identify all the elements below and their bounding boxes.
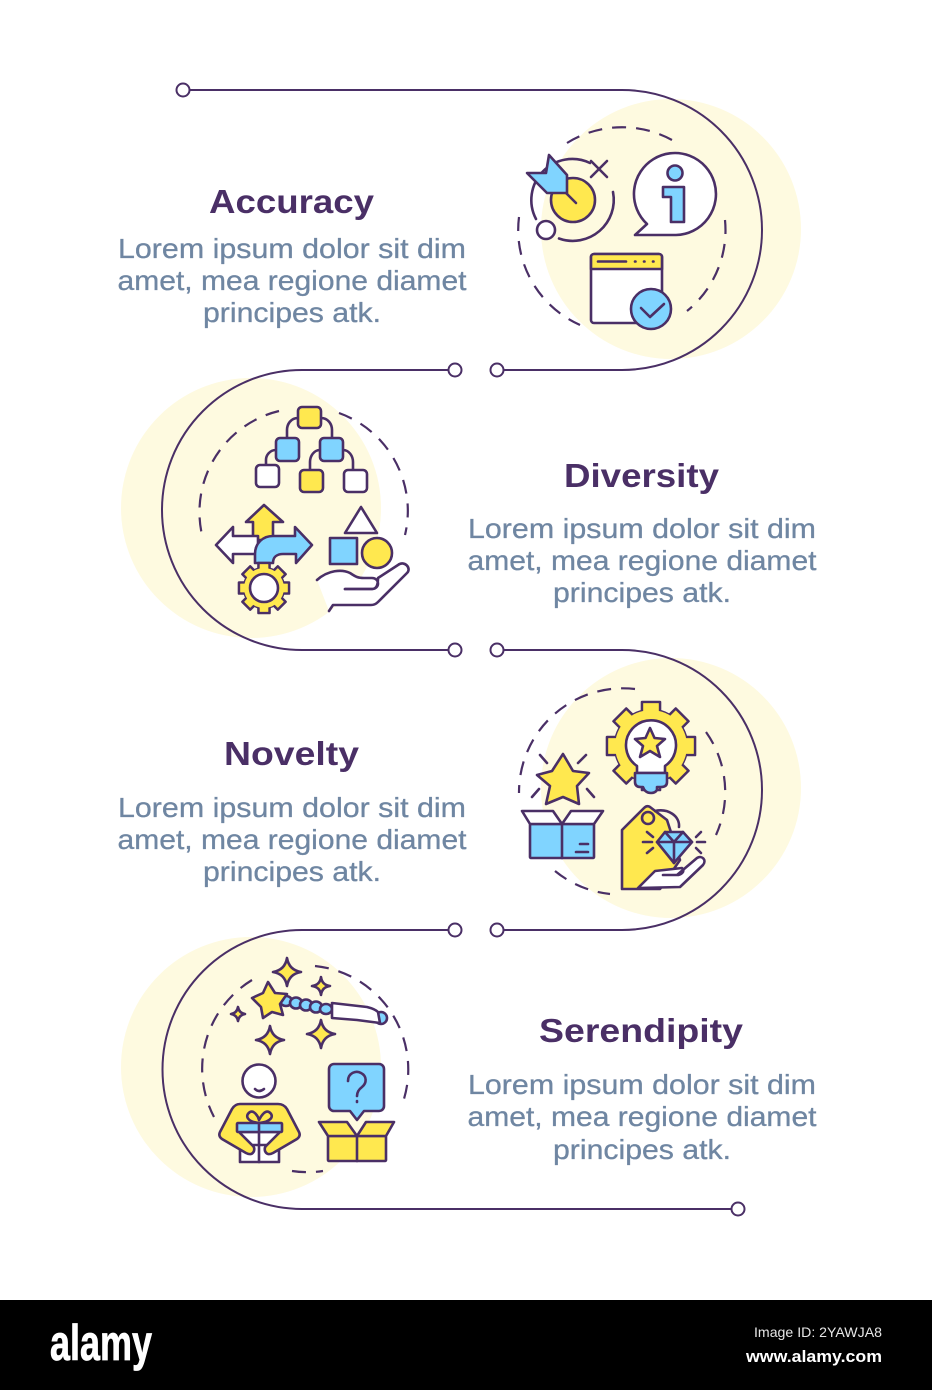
dashed ring [199, 411, 408, 539]
icon: target with arrow [527, 155, 614, 241]
panel: serendipity text [468, 1012, 817, 1165]
text block: novelty: amet, mea regione diamet [118, 824, 467, 855]
icon: lightbulb in gear [607, 702, 695, 793]
dashed ring [519, 688, 725, 894]
icon: star rising from box [522, 754, 603, 858]
website: www.alamy.com [745, 1347, 882, 1366]
text block: diversity: Lorem ipsum dolor sit dim [468, 513, 816, 544]
connector line with end dots [162, 84, 762, 1216]
text block: novelty: Lorem ipsum dolor sit dim [118, 792, 466, 823]
icon: magic wand with sparkles [231, 958, 387, 1054]
text block: novelty: principes atk. [203, 856, 381, 887]
text block: serendipity [468, 1069, 817, 1165]
icon: info speech bubble [634, 153, 716, 235]
footer bar [0, 1300, 932, 1390]
text block: serendipity: principes atk. [553, 1134, 731, 1165]
icon: decision tree [256, 407, 367, 492]
text block: serendipity: Lorem ipsum dolor sit dim [468, 1069, 816, 1100]
icon: open box with question bubble [319, 1064, 394, 1161]
image id: Image ID: 2YAWJA8 [754, 1324, 882, 1340]
panel: diversity icons [199, 407, 409, 613]
icon: person holding gift [219, 1064, 300, 1162]
heading: serendipity: Serendipity [539, 1012, 744, 1049]
text block: accuracy [118, 233, 467, 328]
panel: serendipity icons [202, 958, 408, 1172]
panel: accuracy text [118, 183, 467, 328]
panel: accuracy icons [518, 127, 726, 329]
text block: diversity: amet, mea regione diamet [468, 545, 817, 576]
panel: diversity text [468, 457, 817, 608]
text block: accuracy: amet, mea regione diamet [118, 265, 467, 296]
text block: diversity [468, 513, 817, 608]
text block: diversity: principes atk. [553, 577, 731, 608]
text block: novelty [118, 792, 467, 887]
text block: serendipity: amet, mea regione diamet [468, 1101, 817, 1132]
panel: novelty text [118, 735, 467, 887]
heading: accuracy: Accuracy [209, 183, 375, 220]
icon: branching arrows with gear [216, 505, 312, 613]
logo: alamy: alamy [50, 1315, 152, 1371]
icon: browser window with check [591, 254, 671, 329]
yellow backdrop circle: diversity [121, 378, 381, 638]
text block: accuracy: principes atk. [203, 297, 381, 328]
icon: hand holding shapes [317, 507, 409, 611]
heading: novelty: Novelty [224, 735, 360, 772]
icon: price tag with diamond in hand [622, 806, 705, 889]
panel: novelty icons [519, 688, 725, 894]
dashed ring [518, 127, 726, 325]
yellow backdrop circle: novelty [541, 658, 801, 918]
yellow backdrop circle: serendipity [121, 937, 381, 1197]
heading: diversity: Diversity [564, 457, 720, 494]
dashed ring [202, 966, 408, 1172]
text block: accuracy: Lorem ipsum dolor sit dim [118, 233, 466, 264]
yellow backdrop circle: accuracy [541, 99, 801, 359]
